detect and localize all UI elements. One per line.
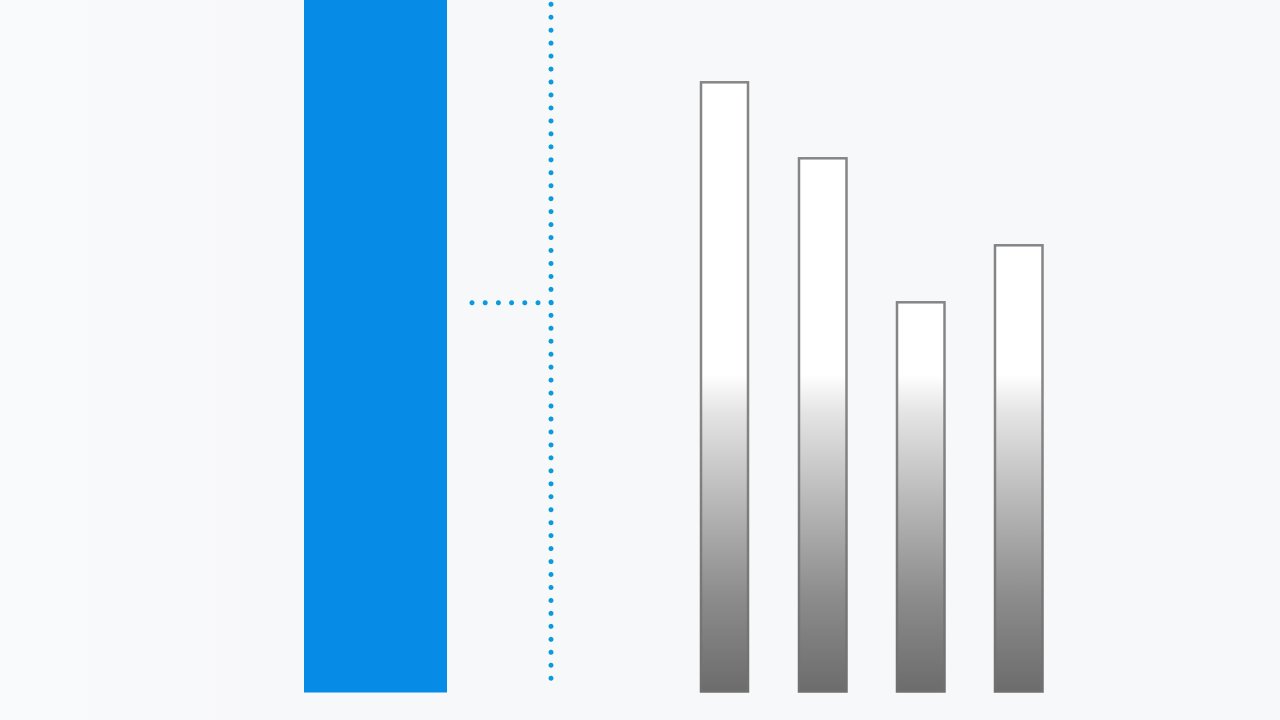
bar chart	[701, 82, 1042, 692]
blue column	[304, 0, 447, 692]
bar 4	[995, 245, 1042, 692]
dotted vertical line	[548, 4, 554, 680]
bar 1	[701, 82, 748, 692]
dotted horizontal connector	[472, 300, 552, 305]
bar 2	[799, 158, 846, 692]
bar 3	[897, 302, 944, 692]
